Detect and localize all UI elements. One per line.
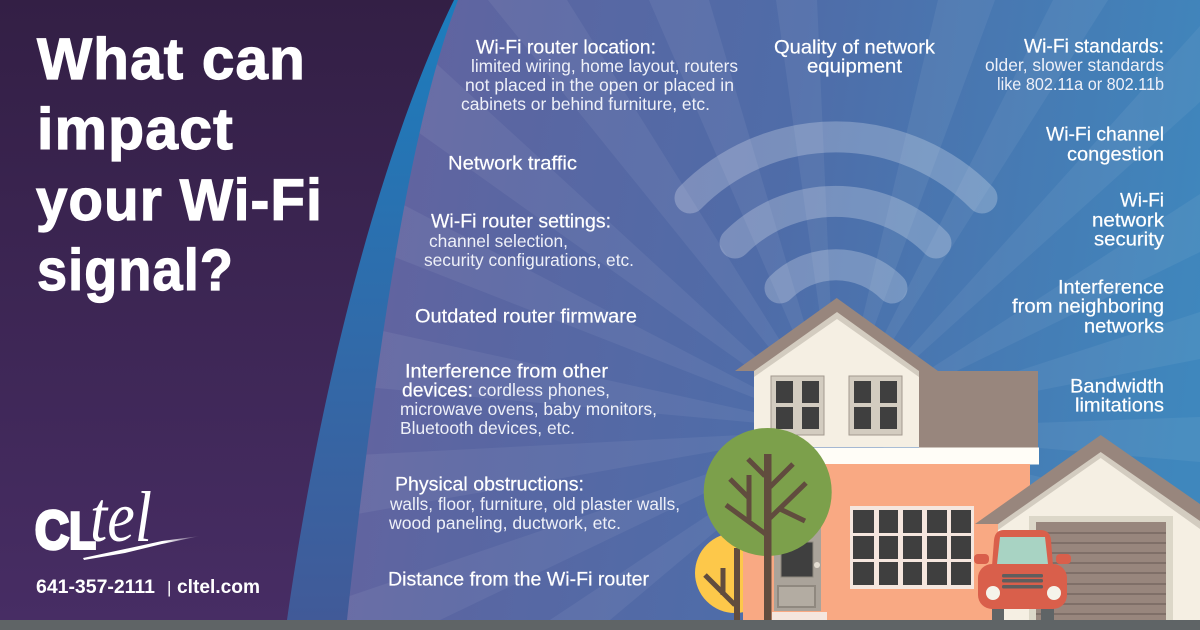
logo: CLtel: tel	[90, 477, 152, 557]
text: router settings: channel selection,	[429, 231, 568, 251]
text: interference from other devices: Bluetooth devices, etc.	[400, 418, 575, 438]
title: signal?	[37, 238, 234, 303]
bottom gray bar	[0, 620, 1200, 630]
text: distance: Distance from the Wi-Fi router	[388, 569, 650, 591]
left purple panel	[0, 0, 454, 620]
contact line: 641-357-2111	[36, 577, 155, 598]
upper wall	[754, 319, 919, 447]
text: network equipment	[774, 37, 935, 78]
green tree	[704, 428, 832, 620]
white band	[750, 448, 1039, 464]
text: router location: cabinets or behind furniture, etc.	[461, 94, 710, 114]
text: router settings: security configurations, etc.	[424, 250, 634, 270]
contact line	[36, 577, 260, 598]
contact line: |	[167, 578, 171, 597]
text: neighboring interference: from neighboring	[1012, 296, 1164, 318]
text: physical obstructions	[388, 474, 680, 533]
contact line: cltel.com	[177, 577, 260, 598]
logo: CLtel	[35, 477, 200, 560]
text: router location: Wi-Fi router location:	[476, 37, 656, 59]
curved blue band	[286, 0, 458, 620]
text: neighboring interference	[1012, 277, 1164, 338]
title: impact	[37, 97, 234, 162]
upper gray roof section	[919, 371, 1038, 448]
text: network traffic: Network traffic	[448, 153, 577, 175]
title: your Wi-Fi	[36, 168, 323, 233]
text: wifi standards	[985, 36, 1164, 94]
logo: CLtel: C	[35, 500, 69, 560]
text: interference from other devices: Interference from other	[405, 361, 609, 383]
text: channel congestion	[1046, 124, 1164, 166]
text: network security: network	[1092, 210, 1164, 232]
text: physical obstructions: Physical obstructions:	[395, 474, 584, 496]
text: router settings	[424, 211, 634, 270]
text: bandwidth: Bandwidth	[1070, 376, 1164, 398]
text: bandwidth: limitations	[1075, 395, 1164, 417]
yellow tree	[695, 533, 775, 620]
text: network equipment: Quality of network	[774, 37, 935, 59]
text: channel congestion: congestion	[1067, 144, 1164, 166]
text: network equipment: equipment	[807, 56, 903, 78]
garage	[975, 435, 1200, 620]
large window	[850, 506, 974, 589]
text: network security	[1092, 190, 1164, 251]
text: network security: security	[1094, 229, 1164, 251]
background gradient panel	[280, 0, 1200, 620]
wifi symbol	[690, 137, 982, 288]
door	[772, 520, 827, 620]
text: router location: not placed in the open or placed in	[465, 75, 734, 95]
text: wifi standards: Wi-Fi standards:	[1024, 36, 1164, 58]
text: neighboring interference: networks	[1084, 316, 1164, 338]
text: network security: Wi-Fi	[1120, 190, 1164, 212]
text: outdated firmware: Outdated router firmware	[415, 306, 637, 328]
salmon lower wall	[743, 464, 1030, 620]
sunburst rays	[300, 0, 1200, 620]
gable roof	[735, 298, 938, 371]
upper window right	[849, 376, 902, 435]
text: interference from other devices: microwave ovens, baby monitors,	[400, 399, 657, 419]
logo: CLtel: L	[69, 502, 96, 560]
text: channel congestion: Wi-Fi channel	[1046, 124, 1164, 146]
upper window left	[771, 376, 824, 435]
text: interference from other devices	[400, 361, 657, 438]
text: wifi standards: older, slower standards	[985, 55, 1164, 75]
text: physical obstructions: wood paneling, ductwork, etc.	[388, 513, 621, 533]
text: wifi standards: like 802.11a or 802.11b	[997, 74, 1164, 94]
text: router location	[461, 37, 738, 114]
text: physical obstructions: walls, floor, furniture, old plaster walls,	[389, 494, 680, 514]
text: interference from other devices: devices:	[402, 380, 473, 402]
house	[735, 298, 1039, 620]
text: bandwidth	[1070, 376, 1164, 417]
text: neighboring interference: Interference	[1058, 277, 1164, 299]
title	[36, 27, 323, 303]
text: interference from other devices: cordless phones,	[478, 380, 610, 400]
text: router settings: Wi-Fi router settings:	[431, 211, 611, 233]
car	[974, 530, 1071, 620]
title: What can	[37, 27, 306, 92]
text: router location: limited wiring, home layout, routers	[471, 56, 738, 76]
